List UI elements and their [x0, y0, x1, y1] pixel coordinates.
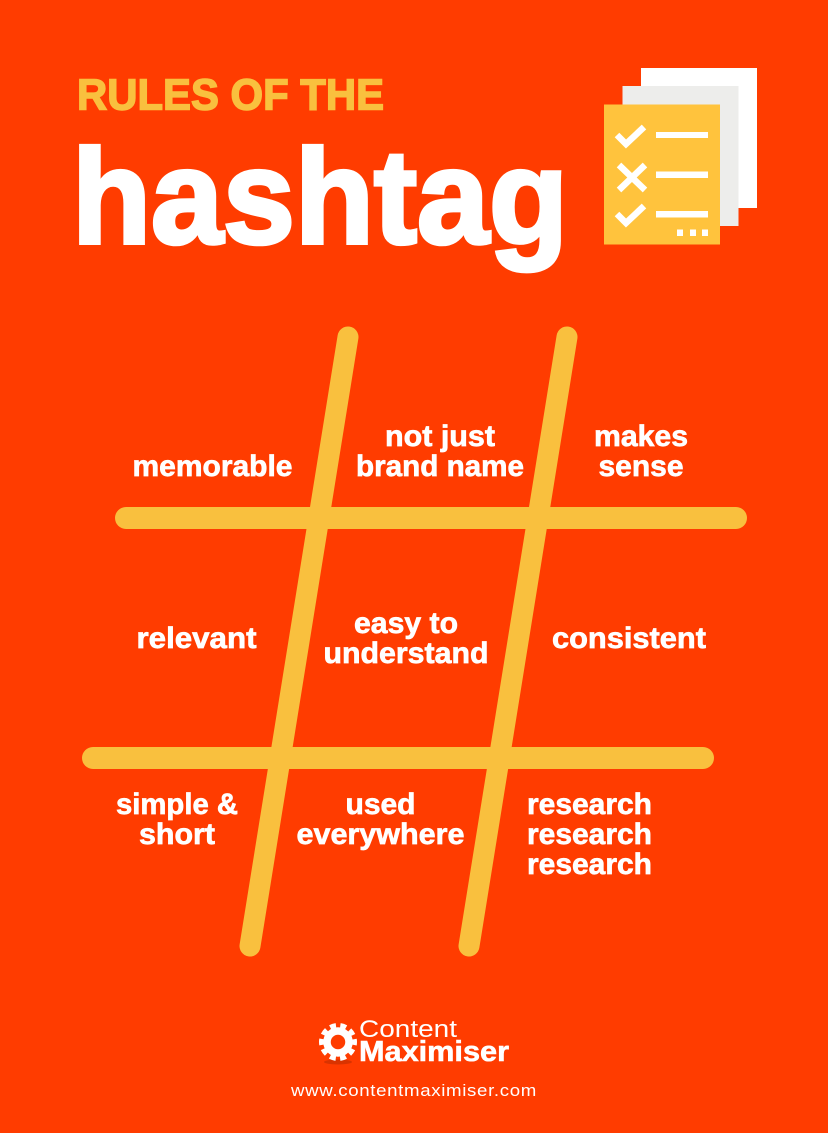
rule: not just brand name: brand name	[356, 450, 524, 483]
rule: makes sense: makes	[594, 420, 688, 453]
rule: not just brand name: not just	[385, 420, 495, 453]
rule: easy to understand: understand	[324, 637, 488, 670]
rule: easy to understand	[324, 607, 488, 670]
rule: research research research: research	[527, 818, 652, 851]
rule: makes sense	[594, 420, 688, 483]
rule: research research research: research	[527, 848, 652, 881]
rule: used everywhere	[296, 788, 464, 851]
rule: consistent: consistent	[552, 622, 706, 655]
logo: content maximiser: Maximiser	[359, 1036, 509, 1068]
logo: content maximiser: Content	[359, 1016, 457, 1043]
rule: easy to understand: easy to	[354, 607, 458, 640]
rule: research research research: research	[527, 788, 652, 821]
rule: makes sense: sense	[598, 450, 684, 483]
hashtag grid	[93, 337, 736, 946]
rule: simple and short	[116, 788, 238, 851]
rule: not just brand name	[356, 420, 524, 483]
logo: content maximiser	[322, 1016, 509, 1068]
rule: simple and short: short	[139, 818, 215, 851]
icon: checklist documents	[604, 68, 757, 244]
rule: used everywhere: used	[346, 788, 416, 821]
rule: memorable: memorable	[132, 450, 292, 483]
icon: gear	[322, 1026, 354, 1064]
rule: simple and short: simple &	[116, 788, 238, 821]
rule: research research research	[527, 788, 652, 881]
heading: rules of the: RULES OF THE	[77, 70, 384, 120]
website url: www.contentmaximiser.com	[290, 1081, 537, 1100]
title: hashtag: hashtag	[72, 123, 568, 272]
rule: used everywhere: everywhere	[296, 818, 464, 851]
rule: relevant: relevant	[136, 622, 256, 655]
